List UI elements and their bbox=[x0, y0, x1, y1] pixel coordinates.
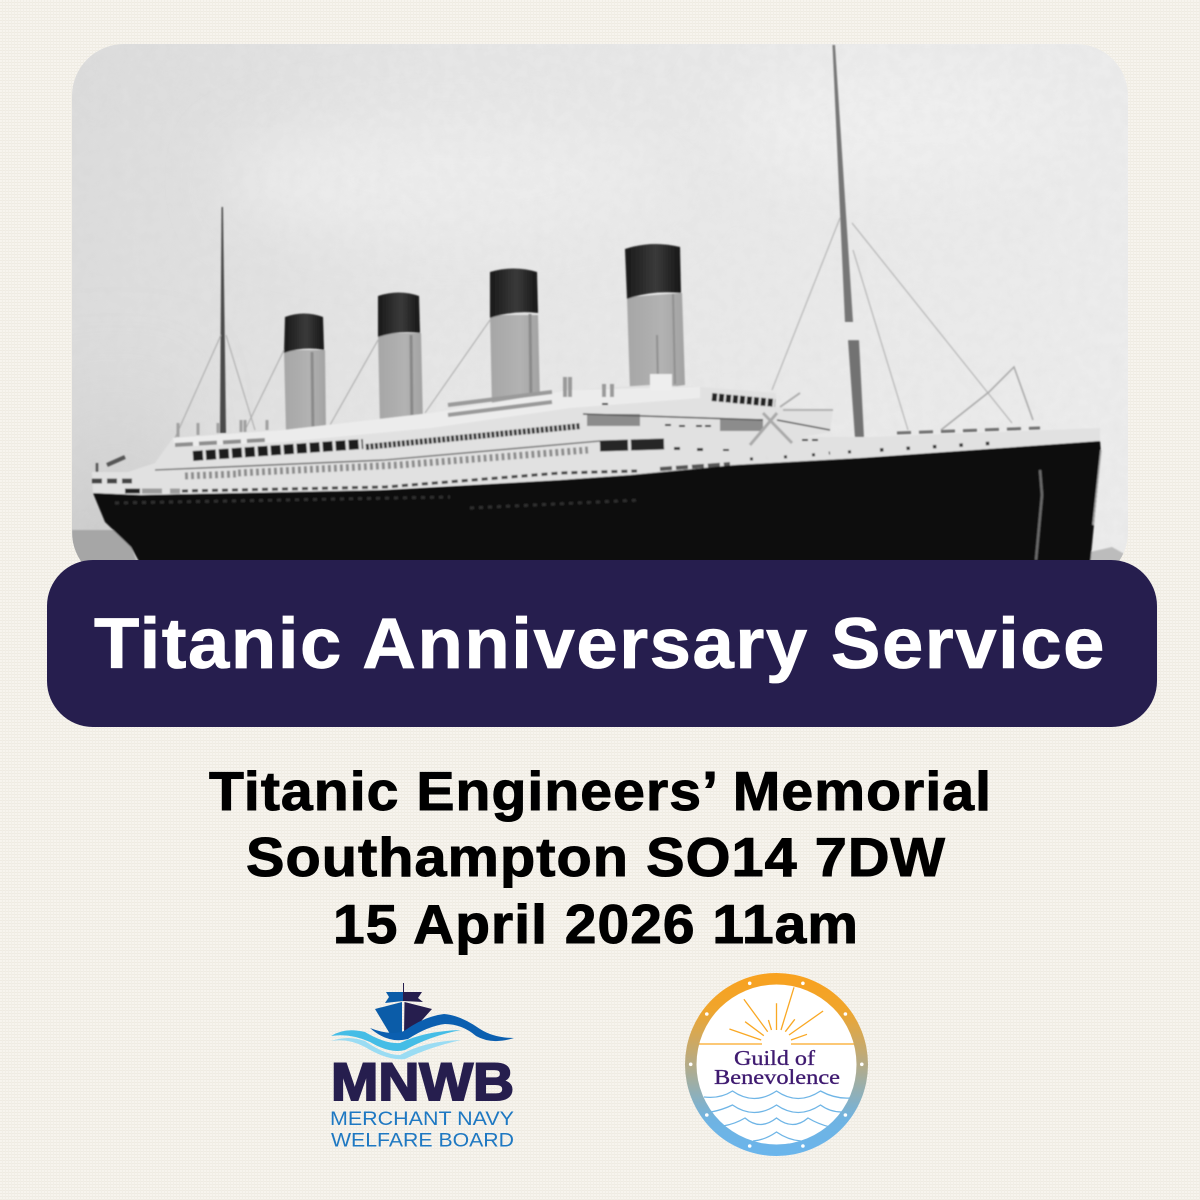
superstructure bbox=[92, 385, 1100, 495]
logo: Guild of Benevolence bbox=[685, 973, 868, 1156]
hull plating sheen bbox=[115, 497, 640, 508]
ring rivets bbox=[689, 982, 864, 1148]
waves bbox=[704, 1091, 850, 1141]
midship grey panels bbox=[587, 420, 763, 425]
distant shore, right bbox=[1086, 547, 1128, 584]
Merchant Navy text: MERCHANT NAVY bbox=[330, 1108, 514, 1130]
porthole interior bbox=[696, 984, 856, 1144]
sky bbox=[72, 44, 1128, 584]
portholes fore deck bbox=[880, 442, 1012, 450]
stem post bbox=[1093, 450, 1101, 525]
lower dashed row bbox=[182, 471, 637, 491]
stern deck vents bbox=[178, 420, 267, 437]
porthole ring bbox=[685, 973, 868, 1156]
deckhouses and lifeboats near funnels bbox=[448, 377, 612, 415]
stern rail bbox=[92, 478, 135, 484]
photo: Titanic at sea bbox=[40, 44, 1128, 584]
hull bbox=[93, 441, 1101, 565]
fore rigging bbox=[772, 218, 1012, 430]
distant shore and water, left bbox=[72, 528, 138, 562]
davit cross bbox=[750, 413, 792, 445]
forecastle gear bbox=[897, 428, 1040, 433]
Guild of: Guild of bbox=[734, 1046, 815, 1070]
MNWB wordmark: MNWB bbox=[331, 1053, 514, 1112]
lower slats bbox=[185, 450, 588, 476]
logo: Merchant Navy Welfare Board bbox=[330, 983, 514, 1152]
title banner bbox=[47, 560, 1157, 727]
anchor deck dark bits bbox=[660, 464, 730, 469]
ship bbox=[72, 45, 1128, 584]
lower dark panes, midship bbox=[600, 444, 664, 446]
fore mast bbox=[832, 45, 865, 438]
flag bbox=[107, 457, 125, 465]
anchor bbox=[1036, 470, 1042, 560]
midship single windows bbox=[605, 403, 815, 451]
boat deck shadows, aft bbox=[175, 440, 265, 445]
flagstaff bbox=[96, 463, 98, 472]
upper bridge wing bbox=[780, 393, 833, 410]
forecastle crane bbox=[941, 367, 1033, 430]
portholes forward bbox=[750, 451, 860, 459]
event details bbox=[209, 761, 992, 955]
address: Southampton SO14 7DW bbox=[246, 827, 946, 888]
funnel 2 bbox=[378, 292, 423, 428]
Welfare Board text: WELFARE BOARD bbox=[331, 1130, 514, 1152]
upper white deck band bbox=[173, 387, 700, 447]
funnel 3 bbox=[490, 268, 540, 408]
promenade windows, forward bbox=[366, 426, 581, 447]
deckhouse white, forward funnel bbox=[650, 374, 672, 390]
aft rigging bbox=[175, 320, 490, 438]
stern dark window bbox=[125, 488, 140, 494]
date and time: 15 April 2026 11am bbox=[333, 894, 859, 955]
lower sky haze bbox=[72, 159, 366, 560]
bridge windows bbox=[712, 397, 775, 403]
aft mast bbox=[220, 207, 226, 433]
venue: Titanic Engineers’ Memorial bbox=[209, 761, 992, 822]
deck band and line bbox=[155, 441, 600, 470]
title text: Titanic Anniversary Service bbox=[94, 605, 1106, 684]
funnel 1 bbox=[284, 314, 326, 433]
midship window line bbox=[583, 414, 830, 430]
promenade windows, aft bbox=[193, 444, 363, 456]
Benevolence: Benevolence bbox=[714, 1065, 840, 1089]
icon: ship and waves bbox=[331, 983, 514, 1059]
stern grey windows bbox=[142, 488, 180, 494]
sun rays and horizon bbox=[699, 987, 854, 1044]
funnel 4 bbox=[625, 244, 685, 392]
sky mottling bbox=[72, 44, 1128, 584]
